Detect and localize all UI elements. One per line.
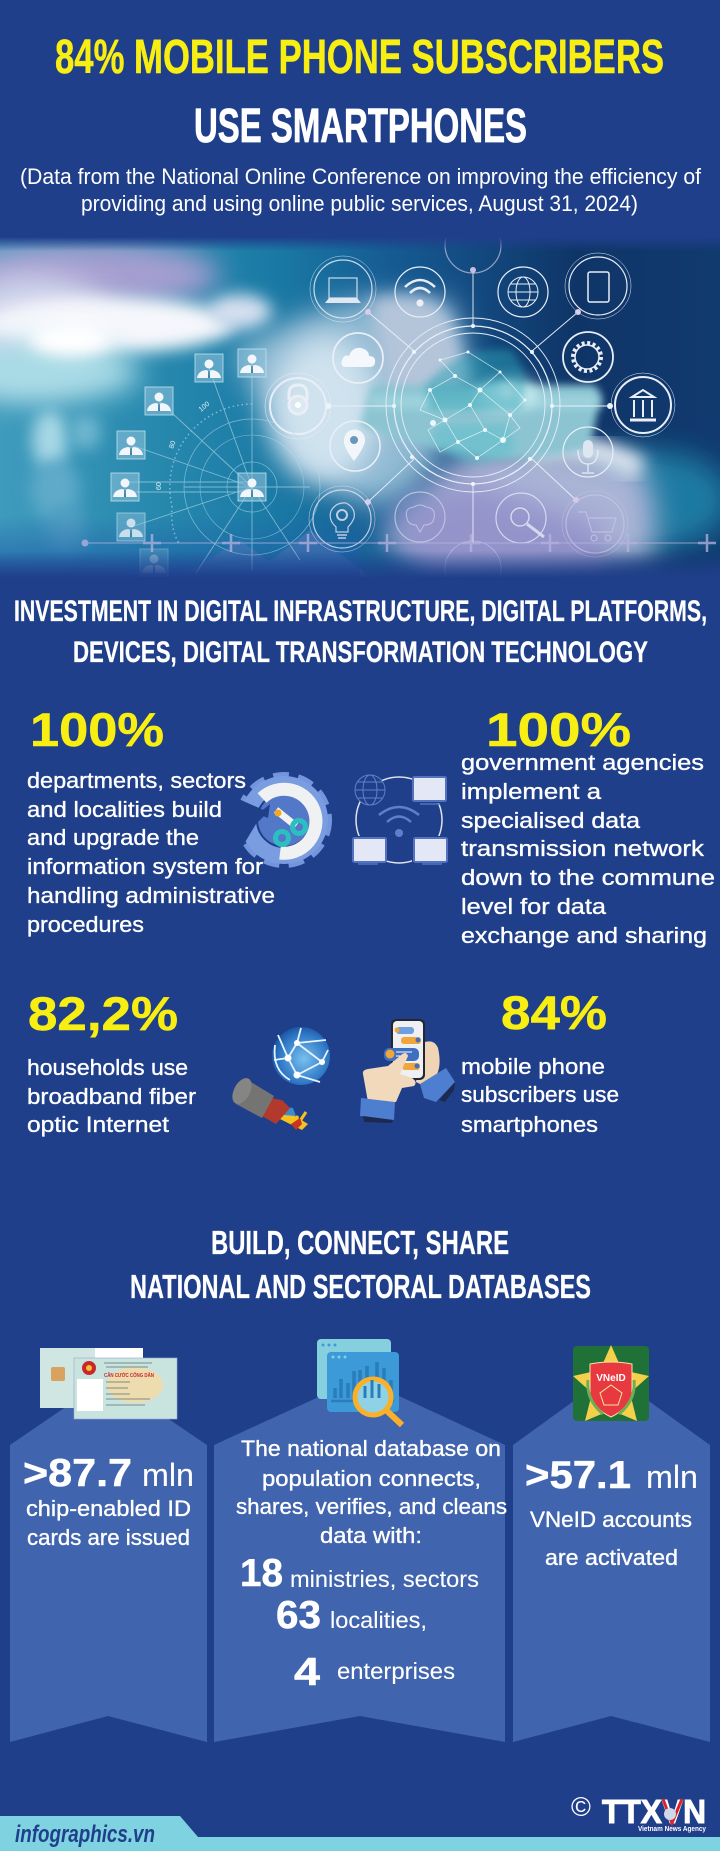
description: population connects, [262, 1466, 481, 1491]
heading: investment [14, 595, 707, 669]
stat: 82,2% households [27, 987, 196, 1137]
description: are activated [545, 1545, 678, 1570]
heading: build connect share: BUILD, CONNECT, SHARE [211, 1224, 509, 1261]
icon: blue network globe [272, 1027, 330, 1085]
stat: 82,2% households: households use [27, 1055, 188, 1080]
footer source tab [0, 1816, 720, 1851]
big number: >87.7 [23, 1452, 132, 1495]
icon: cart [562, 491, 628, 557]
figure: 63 localities: localities, [330, 1607, 427, 1633]
description [530, 1507, 692, 1570]
subtitle: providing and using online public services, August 31, 2024) [81, 191, 638, 216]
icon: VNeID badge: VNeID [596, 1373, 626, 1384]
right hand [416, 1041, 440, 1086]
radar and people network [82, 349, 716, 577]
figure: 18 ministries: ministries, sectors [290, 1566, 479, 1592]
stat: 84% mobile subscribers: smartphones [461, 1112, 598, 1137]
stat: 100% departments: 100% [30, 703, 164, 756]
radar labels: 80 [168, 440, 178, 450]
hero photo: digital network over a hand holding a tablet [0, 238, 720, 576]
stat: 84% mobile subscribers: 84% [501, 986, 607, 1039]
description [26, 1496, 191, 1550]
icon: map pin [330, 421, 380, 471]
radar labels: 100 [198, 401, 211, 414]
stat: 100% government agencies: government agencies [461, 750, 704, 775]
description: shares, verifies, and cleans [236, 1494, 507, 1519]
description: cards are issued [27, 1525, 190, 1550]
icon: ID cards: CĂN CƯỚC CÔNG DÂN [104, 1371, 154, 1379]
figure: 18 ministries [240, 1552, 479, 1595]
panel: chip-enabled ID cards [10, 1348, 207, 1742]
figure: 4 enterprises: enterprises [337, 1658, 455, 1684]
icon: brain [395, 492, 445, 542]
stat: 100% government agencies: level for data [461, 894, 607, 919]
stat: 100% departments: handling administrative [27, 883, 275, 908]
big number: >57.1 [525, 1454, 631, 1497]
icon: hands holding smartphone [360, 1019, 455, 1123]
stat: 100% departments: information system for [27, 854, 263, 879]
phone [391, 1019, 425, 1080]
subtitle [20, 164, 702, 216]
icon: microphone [563, 427, 613, 477]
heading: build connect share [130, 1224, 591, 1305]
timeline with plus marks [82, 534, 716, 552]
icon: wifi network of computers [352, 775, 447, 864]
icon: cloud [333, 333, 383, 383]
central globe [420, 349, 526, 463]
stat: 100% government agencies [461, 703, 715, 948]
hub rings and connectors [325, 267, 613, 543]
radar labels [156, 401, 211, 490]
footer source tab: infographics.vn [15, 1821, 155, 1848]
icon: bank [611, 373, 675, 437]
wifi symbol [379, 807, 419, 837]
icon: globe [498, 267, 548, 317]
stat: 100% departments: departments, sectors [27, 768, 246, 793]
stat: 82,2% households: optic Internet [27, 1112, 169, 1137]
left hand [363, 1053, 416, 1102]
stat: 100% departments: procedures [27, 912, 144, 937]
stat: 100% government agencies: 100% [486, 703, 631, 756]
title [55, 31, 664, 153]
stat: 100% departments [27, 703, 275, 937]
icon: gear with wrench [232, 777, 327, 874]
stat: 100% government agencies: specialised data [461, 808, 641, 833]
person tiles [111, 349, 266, 577]
stat: 100% departments: and upgrade the [27, 825, 199, 850]
computers [352, 776, 446, 863]
icon: light bulb [309, 486, 375, 552]
unit: mln [646, 1459, 698, 1495]
figure: 63 localities: 63 [276, 1594, 321, 1637]
small globe [355, 775, 385, 805]
description [236, 1436, 507, 1548]
icon: search [496, 493, 546, 543]
icon circles [264, 238, 676, 575]
stat: 82,2% households: 82,2% [28, 987, 178, 1040]
icon: fiber optic cable [228, 1075, 308, 1130]
description: VNeID accounts [530, 1507, 692, 1532]
stat: 100% government agencies: exchange and sharing [461, 923, 707, 948]
radar labels: 60 [156, 482, 163, 490]
icon: padlock [265, 373, 331, 439]
stat: 84% mobile subscribers [461, 986, 619, 1137]
icon: ID cards [40, 1348, 177, 1419]
title line 2: USE SMARTPHONES [194, 100, 527, 153]
stat: 84% mobile subscribers: mobile phone [461, 1054, 605, 1079]
icon: smartphone [565, 253, 631, 319]
panel: national database [214, 1339, 507, 1742]
icon: wifi [395, 267, 445, 317]
copyright logo TTXVN: Vietnam News Agency [638, 1826, 706, 1833]
copyright logo TTXVN: TTXVN [602, 1793, 706, 1830]
description: data with: [320, 1523, 422, 1548]
stat: 100% government agencies: down to the commune [461, 865, 715, 890]
icon: data windows and magnifier [317, 1339, 402, 1425]
description: The national database on [241, 1436, 501, 1461]
radar rings [125, 363, 320, 573]
stat: 100% government agencies: implement a [461, 779, 602, 804]
copyright logo TTXVN [571, 1792, 706, 1833]
stat: 84% mobile subscribers: subscribers use [461, 1082, 619, 1107]
icon: laptop [310, 256, 376, 322]
icon: document partials [445, 217, 501, 597]
subtitle: (Data from the National Online Conference on improving the efficiency of [20, 164, 702, 189]
unit: mln [142, 1457, 194, 1493]
stat: 100% departments: and localities build [27, 797, 222, 822]
icon: gear [563, 332, 613, 382]
figure: 18 ministries: 18 [240, 1552, 283, 1595]
figure: 63 localities [276, 1594, 427, 1637]
panel: VNeID accounts [513, 1345, 710, 1742]
stat: 82,2% households: broadband fiber [27, 1084, 196, 1109]
stat: 100% government agencies: transmission network [461, 836, 705, 861]
copyright logo TTXVN: © [571, 1792, 591, 1822]
description: chip-enabled ID [26, 1496, 191, 1521]
figure: 4 enterprises: 4 [294, 1651, 320, 1694]
icon: VNeID badge [573, 1345, 649, 1421]
figure: 4 enterprises [294, 1651, 455, 1694]
